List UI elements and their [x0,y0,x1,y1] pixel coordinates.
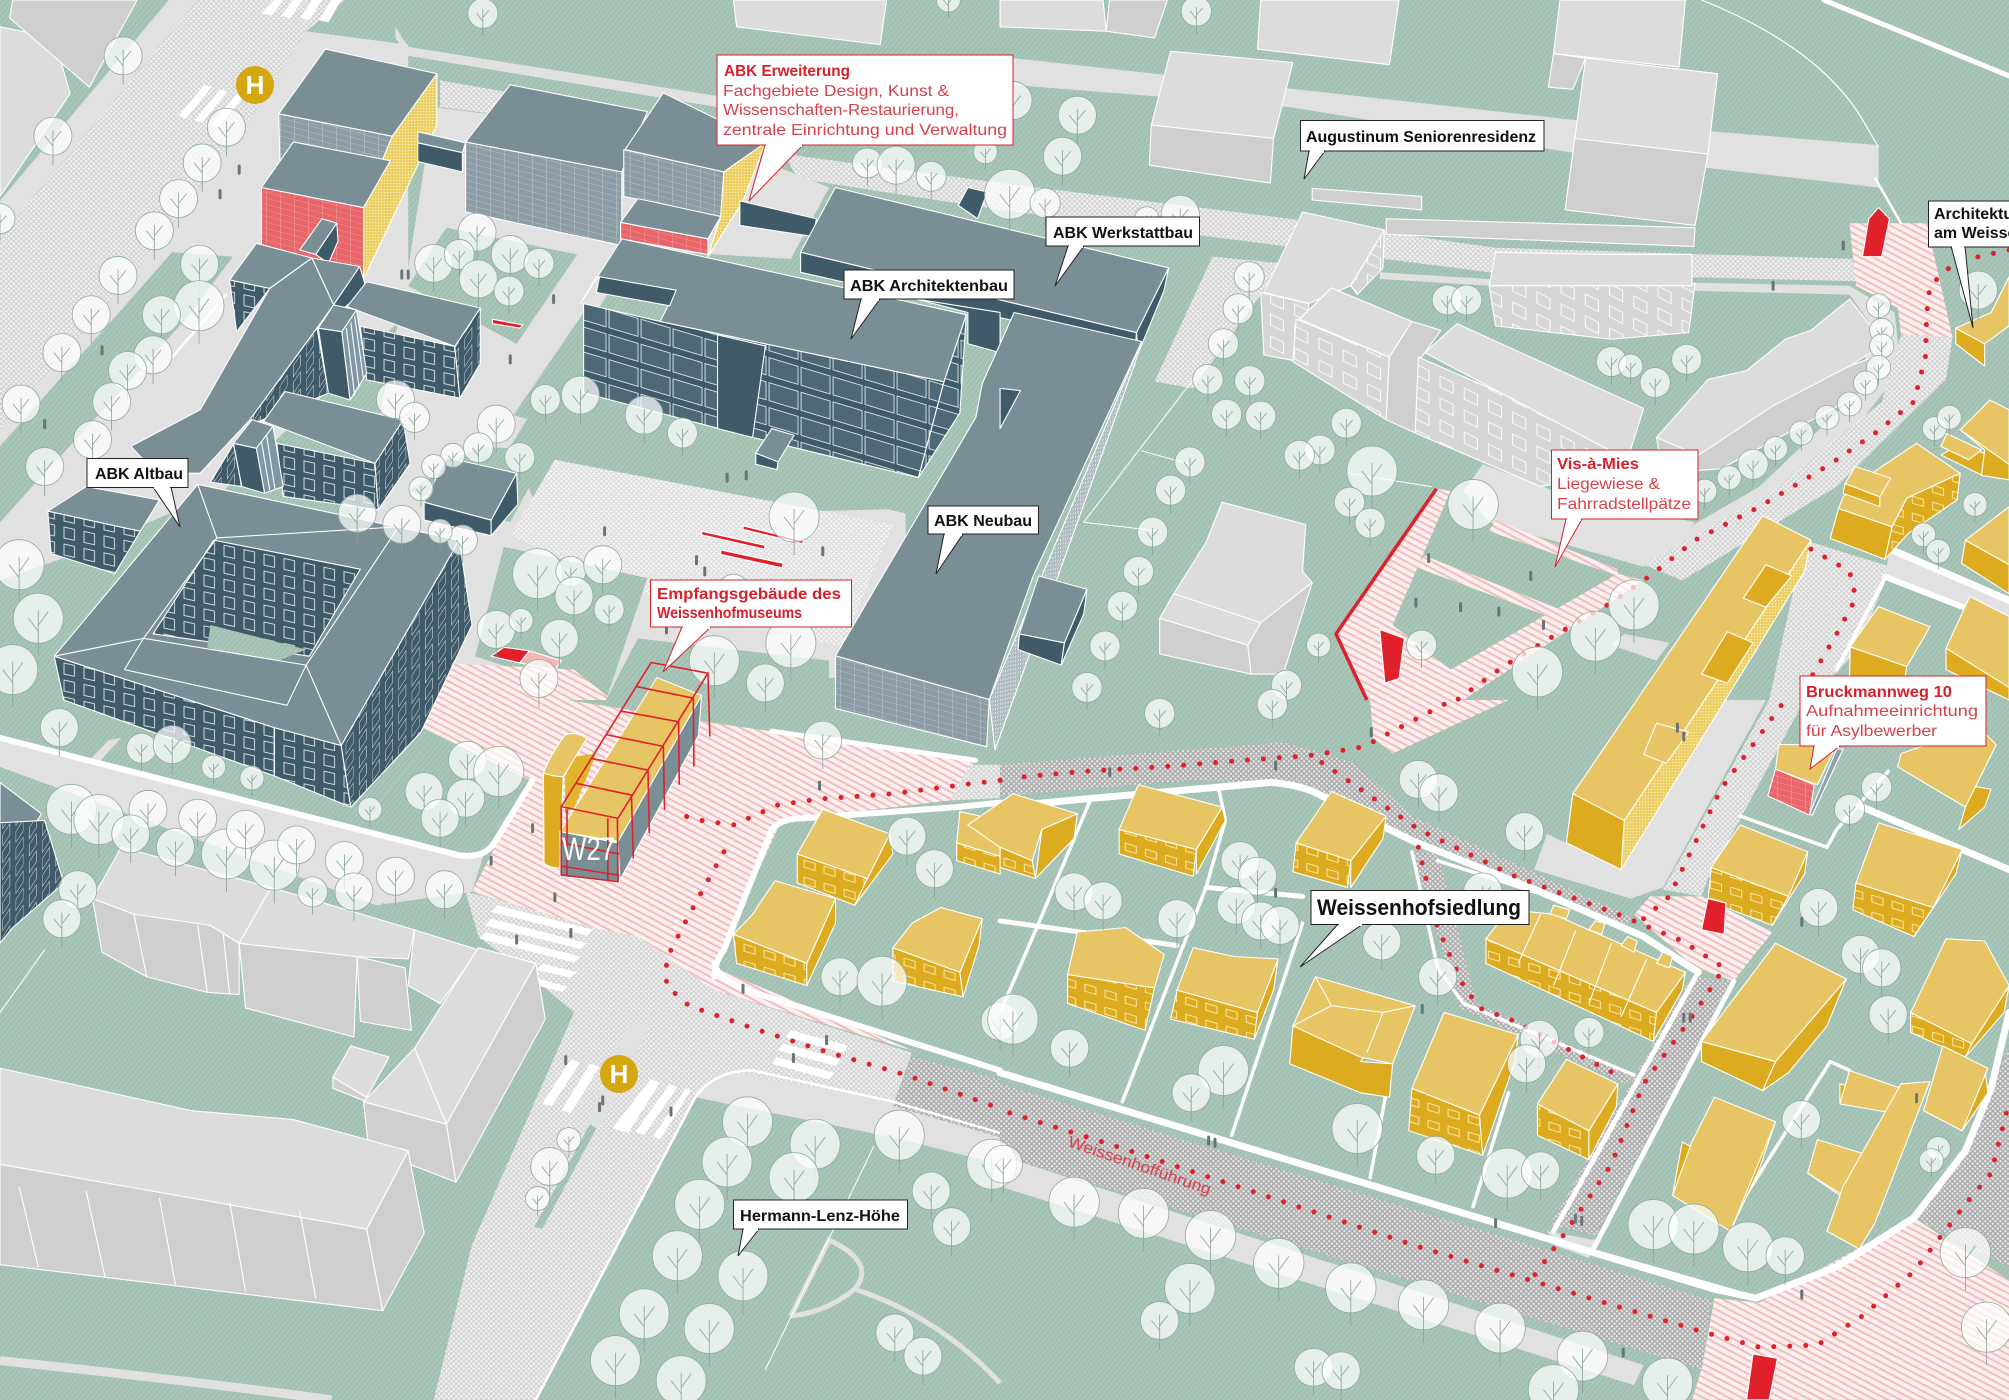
people silhouettes [43,165,1918,1358]
trees: north-east [984,0,1997,710]
building: Weissenhofsiedlung houses centre [968,785,1618,1160]
bus stop marker south: H [610,1059,628,1089]
callout: Bruckmannweg 10: Aufnahmeeinrichtung [1806,703,1978,720]
callout: ABK Erweiterung: Fachgebiete Design, Kunst & [723,83,949,100]
ground: south-east quadrant [1000,700,2009,1400]
building: ABK Neubau annex [1018,576,1087,665]
callout: Vis-à-Mies: Liegewiese & [1557,476,1660,493]
icon: red tower Architekturgalerie [1862,208,1889,257]
callout: ABK Erweiterung: zentrale Einrichtung und Verwaltung [723,122,1007,139]
building: yellow houses east [1830,277,2009,700]
building: grey houses south-west [0,847,545,1311]
callout: ABK Erweiterung: ABK Erweiterung [724,63,850,80]
building: Weissenhofsiedlung houses west [733,809,1000,997]
W27 scaffold frame in red [561,662,710,882]
trees: north-west [0,0,997,712]
callout: ABK Werkstattbau: ABK Werkstattbau [1053,225,1193,242]
building: Weissenhofsiedlung row houses [1486,905,1685,1041]
callout: Augustinum Seniorenresidenz [1300,120,1544,179]
callout: Empfangsgebäude des Weissenhofmuseums: Weissenhofmuseums [657,605,802,622]
callout: Weissenhofsiedlung [1300,890,1529,967]
building: ABK Erweiterung [261,49,816,279]
callout: Weissenhofsiedlung: Weissenhofsiedlung [1317,895,1521,920]
callout: ABK Architektenbau [844,270,1014,339]
ground: north-west quadrant [0,0,1000,700]
callout: Bruckmannweg 10: Bruckmannweg 10 [1806,684,1952,701]
trees: south-west [40,709,1019,1400]
callout: ABK Erweiterung [717,55,1013,201]
red dotted route [667,250,2009,1347]
callout: ABK Neubau: ABK Neubau [934,513,1032,530]
bus stop marker north [236,66,274,104]
building: ABK Architektenbau [580,239,966,478]
route: central path [1010,700,2009,1347]
callout: Augustinum Seniorenresidenz: Augustinum Seniorenresidenz [1306,129,1536,146]
callout: ABK Erweiterung: Wissenschaften-Restaurierung, [723,102,959,119]
callout: Vis-à-Mies [1552,450,1698,567]
callout: Architekturgalerie am Weissenhof [1928,201,2009,328]
callout: Hermann-Lenz-Höhe [734,1200,908,1256]
callout: Empfangsgebäude des Weissenhofmuseums: Empfangsgebäude des [657,586,841,603]
callout: Empfangsgebäude des Weissenhofmuseums [650,580,852,672]
callout: ABK Architektenbau: ABK Architektenbau [850,278,1008,295]
callout: ABK Altbau [87,458,188,527]
icon: red tower Bruckmannweg [1702,899,1726,934]
callout: Vis-à-Mies: Fahrradstellpätze [1557,496,1691,513]
building: grey block at lawn [1160,502,1312,674]
bus stop marker north: H [246,70,264,100]
route: west path [667,780,1000,1108]
callout: ABK Werkstattbau [1046,217,1200,286]
building: dark house west edge [0,783,64,943]
W27 wordmark: W27 [562,831,615,867]
icon: red tower Vis-a-Mies [1380,629,1404,683]
building: grey houses top left [0,0,887,196]
building: grey blocks north [1000,0,1718,246]
building: long yellow slab [1566,516,1811,870]
building: yellow houses south-east [1673,727,2009,1249]
building: red pavilions [491,319,804,670]
trees: south-east [984,689,2009,1400]
ground: south-west quadrant [0,700,1000,1400]
route: upper path [1457,250,2009,700]
callout: Bruckmannweg 10 [1800,676,1986,769]
building: ABK Altbau main courtyard block [54,484,472,807]
building: ABK Werkstattbau [801,187,1169,353]
callout: Vis-à-Mies: Vis-à-Mies [1557,456,1639,473]
callout: Bruckmannweg 10: für Asylbewerber [1806,723,1938,740]
callout: Hermann-Lenz-Höhe: Hermann-Lenz-Höhe [740,1208,900,1225]
building: W27 reception building [543,678,702,882]
building: ABK Neubau [836,312,1142,750]
bus stop marker south [600,1055,638,1093]
icon: red tower south [1747,1354,1777,1400]
road label: Weissenhofführung: Weissenhofführung [1066,1134,1213,1199]
callout: ABK Altbau: ABK Altbau [95,466,183,483]
building: Augustinum Seniorenresidenz [1261,212,1885,487]
building: ABK Altbau wings [48,243,518,574]
callout: ABK Neubau [928,506,1038,574]
ground: north-east quadrant [1000,0,2009,700]
